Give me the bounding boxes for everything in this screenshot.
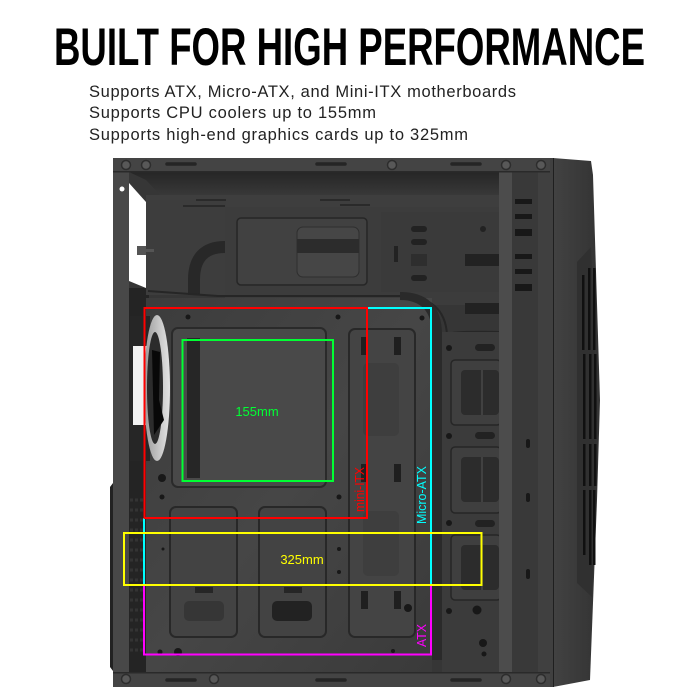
- label: 325mm: 325mm: [280, 552, 324, 567]
- tray right channel: [400, 292, 442, 660]
- tall right cutout: [349, 329, 415, 637]
- main chassis: [113, 158, 553, 687]
- label: 155mm: 155mm: [235, 404, 279, 419]
- thumbscrew: [137, 246, 154, 255]
- feature list: Supports CPU coolers up to 155mm: [89, 104, 376, 122]
- curved cable channel: [194, 247, 225, 295]
- rear opening: [129, 183, 146, 288]
- front panel vents: [577, 247, 597, 597]
- Micro-ATX outline: [144, 308, 431, 585]
- feature list: [89, 83, 516, 144]
- upper panel: [225, 207, 499, 305]
- drive bay panel: [442, 332, 499, 672]
- upper panel left: [146, 200, 226, 295]
- drive bays: [446, 344, 501, 656]
- CPU cooler outline: [182, 340, 333, 481]
- rear dark area: [129, 288, 149, 672]
- rear fan: [130, 315, 170, 461]
- top inner shelf: [129, 172, 499, 195]
- front panel: [553, 158, 600, 687]
- shelf slots: [183, 200, 370, 206]
- frame hole: [120, 186, 124, 192]
- side plate: [381, 212, 499, 292]
- upper right slots: [394, 226, 499, 314]
- bottom frame band: [113, 672, 550, 687]
- mini-ITX outline: [144, 308, 367, 518]
- motherboard tray: [146, 298, 432, 672]
- feature list: Supports ATX, Micro-ATX, and Mini-ITX motherboards: [89, 83, 516, 101]
- front seam: [553, 158, 554, 687]
- tray screw holes: [158, 314, 424, 656]
- lower rear vents: [130, 500, 144, 650]
- label: ATX: ATX: [414, 624, 429, 647]
- top frame band: [113, 158, 550, 172]
- label: Micro-ATX: Micro-ATX: [414, 466, 429, 524]
- feature list: Supports high-end graphics cards up to 325mm: [89, 126, 468, 144]
- case rear bump: [110, 483, 113, 671]
- vertical column left: [499, 172, 512, 672]
- pc case photo illustration: [110, 158, 600, 687]
- recessed plate: [237, 218, 367, 285]
- label: mini-ITX: mini-ITX: [352, 467, 367, 512]
- vertical column right: [538, 158, 553, 687]
- cpu cutout: [172, 328, 326, 487]
- vertical slot strip: [512, 172, 538, 672]
- left frame column: [113, 158, 129, 687]
- graphics card outline: [124, 533, 482, 585]
- plate opening: [297, 227, 359, 277]
- lower tray cutouts: [170, 507, 326, 637]
- ATX outline: [144, 585, 431, 654]
- top shelf lip: [146, 195, 499, 208]
- tray top edge: [148, 291, 499, 335]
